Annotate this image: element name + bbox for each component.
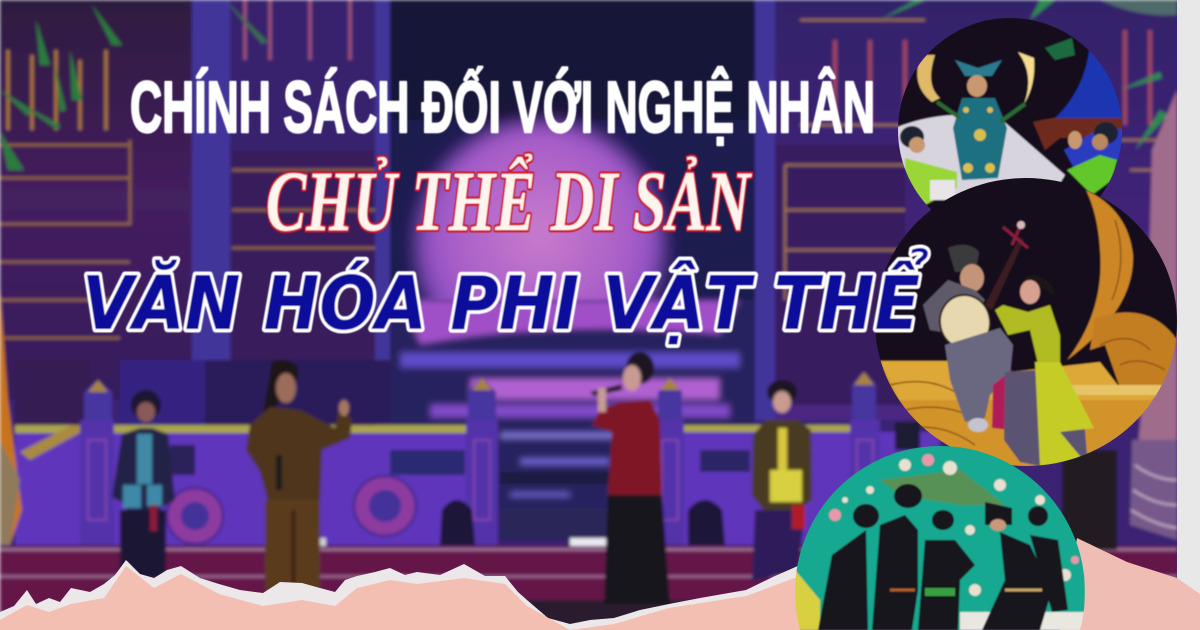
circle photo: đàn tính duo on crescent xyxy=(870,175,1180,470)
title line 2: CHỦ THỂ DI SẢN xyxy=(266,152,752,249)
performer 3 xyxy=(590,352,670,604)
dancers xyxy=(818,484,1068,630)
balustrade xyxy=(15,360,940,548)
circle photo: Thái dance group xyxy=(795,445,1085,630)
balustrade posts xyxy=(80,372,880,545)
right decorative column xyxy=(1100,0,1177,540)
stage spot lights xyxy=(440,500,725,545)
central dark screen xyxy=(390,0,755,420)
performer 4 xyxy=(752,380,812,582)
performer 1 xyxy=(112,390,175,578)
right wall panels xyxy=(755,0,1177,420)
stage floor xyxy=(0,546,1177,630)
left wall panels xyxy=(0,0,390,420)
gray right strip xyxy=(1177,0,1200,630)
water reflection stripes xyxy=(390,300,755,540)
bamboo leaves left xyxy=(0,0,268,170)
left decorative column xyxy=(0,290,22,545)
circle photo: top performer with fire fans xyxy=(898,18,1122,210)
torn paper strip xyxy=(0,538,1200,630)
lotus medallions xyxy=(167,476,416,544)
performer 2 xyxy=(246,360,352,590)
dark figure behind circle xyxy=(1062,450,1117,550)
moon xyxy=(415,120,665,370)
title line 3: VĂN HÓA PHI VẬT THỂ xyxy=(82,247,928,347)
